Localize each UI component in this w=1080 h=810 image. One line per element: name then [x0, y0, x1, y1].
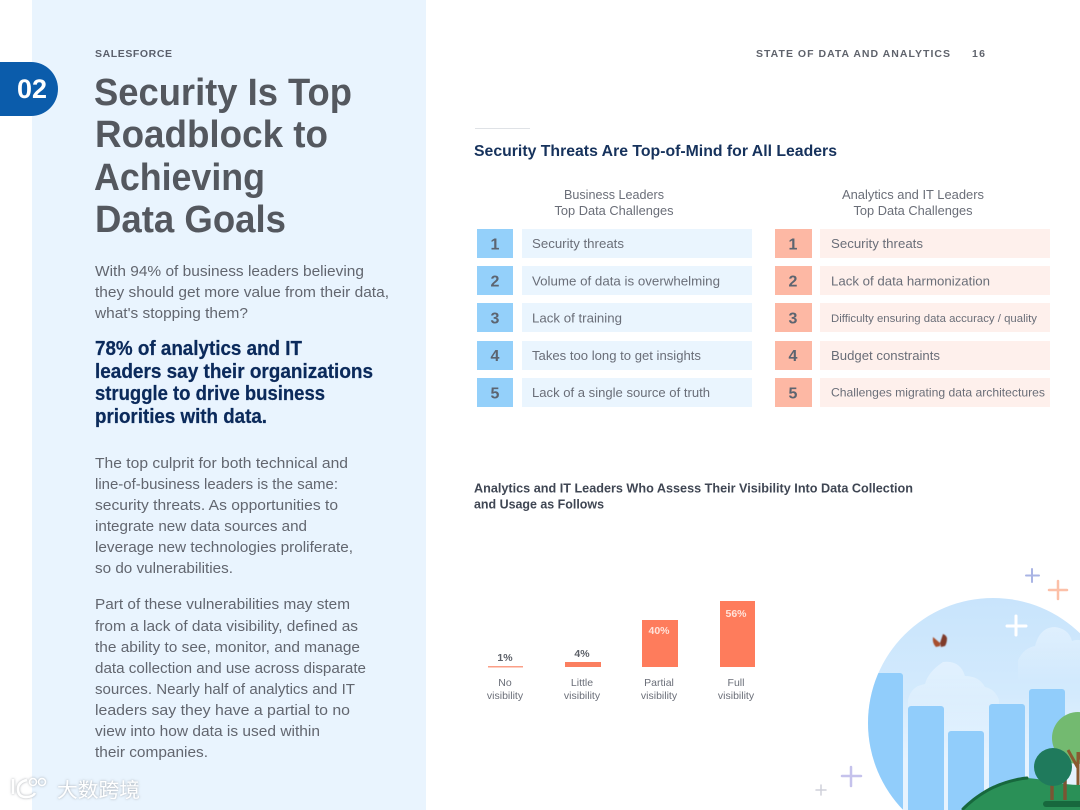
intro text — [94, 263, 389, 322]
body paragraph: top culprit: security threats. As opportunities to — [95, 497, 338, 514]
ranking rows: business leaders: 1 — [491, 236, 500, 254]
ranking rows: business leaders: Security threats — [532, 236, 624, 251]
ranking rows: analytics and IT leaders: Difficulty ensuring data accuracy / quality — [831, 313, 1038, 325]
ranking rows: business leaders: Takes too long to get insights — [532, 348, 701, 363]
body paragraph: data visibility: data collection and use across disparate — [95, 660, 366, 677]
bar: no visibility 1% — [487, 652, 524, 702]
ranking rows: business leaders: 2 — [491, 274, 500, 290]
bar: partial visibility 40% — [641, 620, 678, 702]
ranking rows: analytics and IT leaders: 1 — [789, 236, 798, 254]
ranking rows: analytics and IT leaders — [775, 229, 1050, 407]
bar: partial visibility 40%: Partial — [644, 677, 674, 689]
column heading: business leaders — [554, 188, 674, 218]
intro text: they should get more value from their data, — [95, 284, 389, 301]
watermark: 大数跨境 — [57, 779, 140, 802]
bar: little visibility 4%: visibility — [564, 690, 601, 702]
ranking rows: business leaders: Volume of data is overwhelming — [532, 274, 720, 288]
bar: full visibility 56%: Full — [728, 677, 744, 689]
body paragraph: data visibility: from a lack of data visibility, defined as — [95, 618, 358, 635]
ranking rows: analytics and IT leaders: 4 — [789, 348, 798, 365]
ranking rows: analytics and IT leaders: 3 — [789, 310, 798, 328]
chart heading: and Usage as Follows — [474, 498, 604, 512]
bar: partial visibility 40%: 40% — [648, 625, 670, 637]
bar: no visibility 1%: visibility — [487, 690, 524, 702]
title: Roadblock to — [95, 114, 328, 156]
body paragraph: data visibility — [95, 596, 366, 761]
ranking rows: analytics and IT leaders: Challenges migrating data architectures — [831, 386, 1045, 400]
ranking rows: business leaders: Lack of a single source of truth — [532, 385, 710, 400]
key statistic callout — [95, 338, 373, 428]
column heading: analytics and IT leaders — [842, 188, 984, 218]
heading: security threats: Security Threats Are Top-of-Mind for All Leaders — [474, 143, 837, 160]
body paragraph: data visibility: view into how data is used within — [95, 723, 320, 740]
intro text: With 94% of business leaders believing — [95, 263, 364, 280]
column heading: analytics and IT leaders: Top Data Challenges — [854, 204, 972, 218]
body paragraph: top culprit — [95, 455, 353, 577]
icon: butterfly — [933, 634, 947, 647]
ranking rows: analytics and IT leaders: Budget constraints — [831, 348, 940, 363]
intro text: what's stopping them? — [94, 305, 248, 322]
section tab: 02 — [0, 62, 58, 116]
bar: partial visibility 40%: visibility — [641, 690, 678, 702]
illustration: city of data bars in a globe — [816, 569, 1080, 810]
bar: little visibility 4%: Little — [571, 677, 593, 689]
ranking rows: analytics and IT leaders: Security threats — [831, 236, 923, 251]
bar: full visibility 56%: 56% — [725, 608, 747, 620]
ranking rows: business leaders: 4 — [491, 348, 500, 365]
ranking rows: business leaders — [477, 229, 752, 407]
chart bars as buildings — [866, 673, 1065, 810]
ranking rows: business leaders: 5 — [491, 386, 500, 402]
ranking rows: business leaders: 3 — [491, 310, 500, 328]
bar: no visibility 1%: 1% — [497, 652, 513, 664]
chart heading — [474, 482, 913, 512]
bar chart: visibility — [487, 601, 755, 702]
icon: trees front — [1034, 748, 1080, 807]
ranking rows: analytics and IT leaders: Lack of data harmonization — [831, 274, 990, 288]
bar: little visibility 4%: 4% — [574, 648, 590, 660]
bar: little visibility 4% — [564, 648, 601, 702]
body paragraph: data visibility: Part of these vulnerabilities may stem — [95, 596, 350, 613]
key statistic callout: 78% of analytics and IT — [95, 338, 302, 360]
body paragraph: top culprit: integrate new data sources and — [95, 518, 307, 535]
icon: green hill — [960, 778, 1080, 810]
icon: clouds — [908, 627, 1080, 699]
body paragraph: data visibility: sources. Nearly half of analytics and IT — [95, 681, 355, 698]
bar: no visibility 1%: No — [498, 677, 512, 689]
title: Security Is Top — [94, 72, 352, 114]
key statistic callout: priorities with data. — [95, 406, 267, 428]
panel: business leaders challenges — [477, 188, 752, 407]
body paragraph: top culprit: so do vulnerabilities. — [95, 560, 233, 577]
page header: STATE OF DATA AND ANALYTICS — [756, 48, 950, 60]
ranking rows: analytics and IT leaders: 5 — [789, 386, 798, 402]
title: Data Goals — [95, 199, 286, 241]
key statistic callout: leaders say their organizations — [95, 361, 373, 383]
watermark — [13, 778, 140, 802]
body paragraph: top culprit: leverage new technologies proliferate, — [95, 539, 353, 556]
key statistic callout: struggle to drive business — [95, 383, 325, 405]
ranking rows: analytics and IT leaders: 2 — [789, 274, 798, 290]
icon: trees back — [1052, 712, 1080, 785]
body paragraph: top culprit: line-of-business leaders is the same: — [95, 476, 338, 493]
body paragraph: data visibility: leaders say they have a partial to no — [95, 702, 350, 719]
column heading: business leaders: Top Data Challenges — [554, 204, 674, 218]
body paragraph: top culprit: The top culprit for both technical and — [95, 455, 348, 472]
bar: full visibility 56% — [718, 601, 755, 702]
page header: 16 — [972, 48, 985, 60]
chart heading: Analytics and IT Leaders Who Assess Their Visibility Into Data Collection — [474, 482, 913, 496]
brand label: SALESFORCE — [95, 48, 172, 60]
icon: plus sparkles — [816, 569, 1067, 795]
column heading: analytics and IT leaders: Analytics and IT Leaders — [842, 188, 984, 202]
panel: left sidebar — [32, 0, 426, 810]
bar: full visibility 56%: visibility — [718, 690, 755, 702]
ranking rows: business leaders: Lack of training — [532, 310, 622, 326]
title — [94, 72, 352, 241]
section tab: 02: 02 — [17, 74, 47, 104]
column heading: business leaders: Business Leaders — [564, 188, 664, 202]
title: Achieving — [94, 157, 265, 199]
body paragraph: data visibility: the ability to see, monitor, and manage — [95, 639, 360, 656]
panel: analytics and IT leaders challenges — [775, 188, 1050, 407]
body paragraph: data visibility: their companies. — [95, 744, 208, 761]
